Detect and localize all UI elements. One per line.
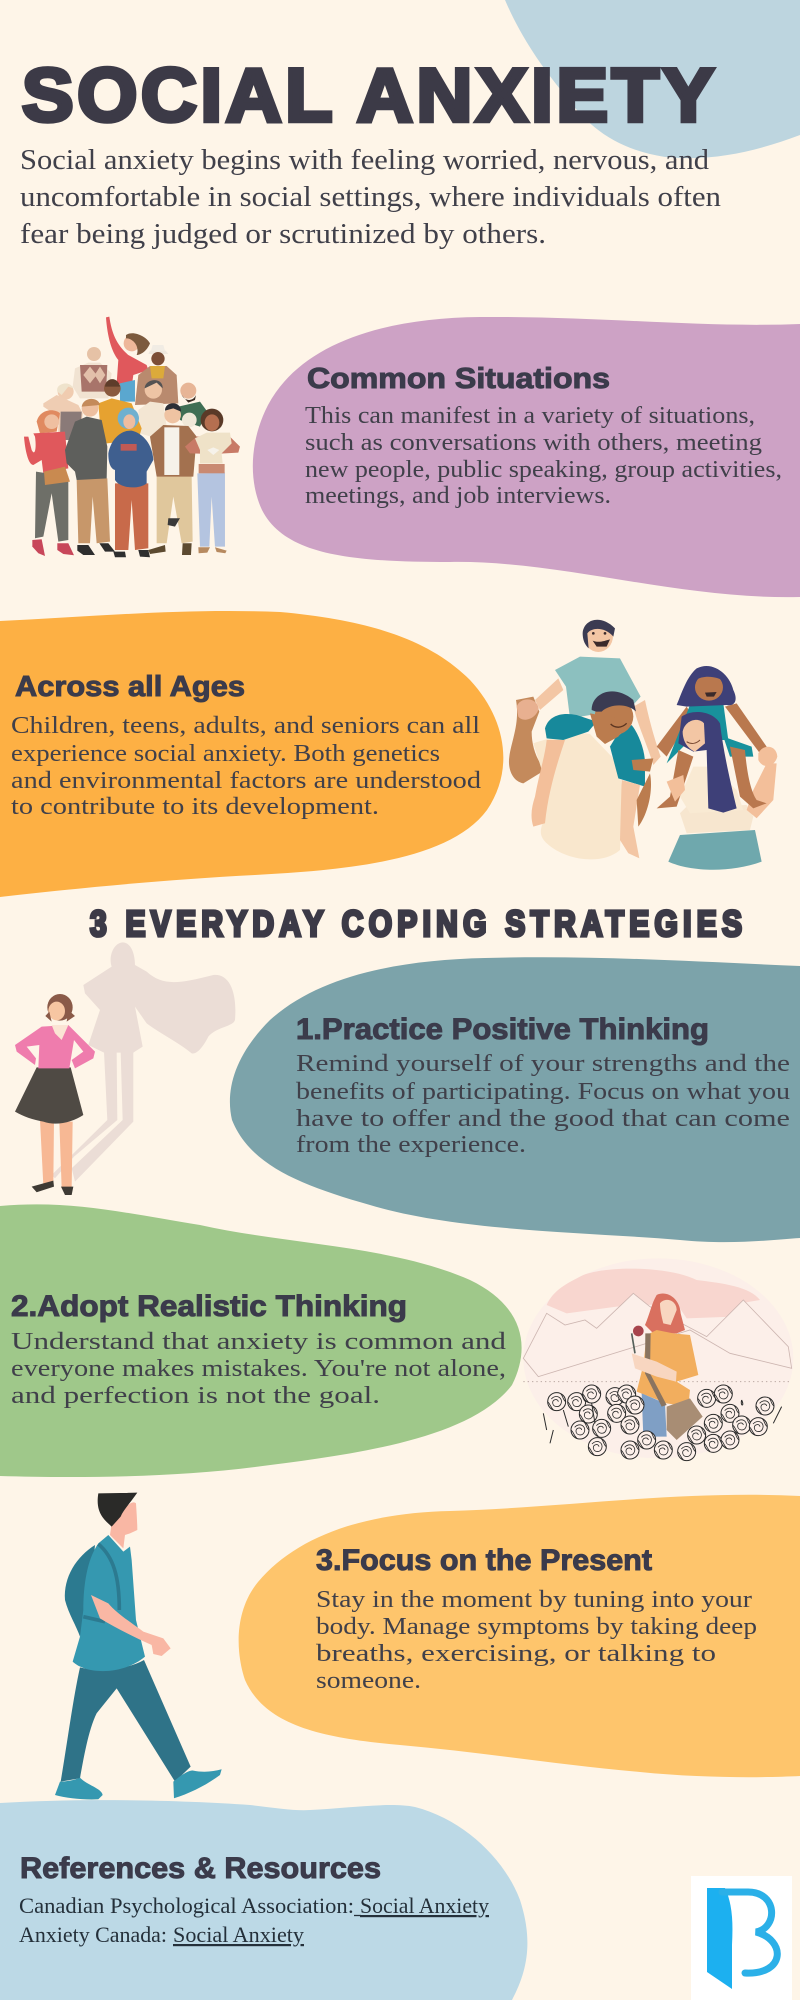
yellow blob (239, 1495, 800, 1777)
heading: coping strategies: 3 EVERYDAY COPING STRATEGIES (90, 904, 742, 945)
body: practice positive thinking: from the experience. (296, 1132, 526, 1158)
illustration: group of people (24, 317, 240, 557)
panel: strategy 1 (230, 957, 800, 1242)
illustration: man walking with backpack (55, 1493, 222, 1799)
body: common situations: meetings, and job interviews. (305, 483, 611, 509)
intro text (20, 144, 722, 250)
body: focus on the present: body. Manage symptoms by taking deep (316, 1614, 757, 1640)
body: common situations (305, 403, 782, 509)
decorative blob: top right (505, 0, 800, 158)
panel: strategy 2 (0, 1204, 522, 1477)
light blue blob (0, 1800, 527, 2000)
heading: practice positive thinking: 1.Practice Positive Thinking (296, 1013, 709, 1046)
body: across all ages (11, 713, 481, 820)
intro text: Social anxiety begins with feeling worried, nervous, and (20, 144, 710, 176)
body: across all ages: Children, teens, adults, and seniors can all (11, 713, 480, 739)
illustration: woman in flower field (523, 1258, 793, 1461)
body: adopt realistic thinking: everyone makes mistakes. You're not alone, (11, 1356, 506, 1382)
panel: strategy 3 (239, 1495, 800, 1777)
illustration: woman with superhero shadow (15, 942, 235, 1195)
reference line 1: Canadian Psychological Association: (19, 1893, 354, 1918)
body: adopt realistic thinking: and perfection is not the goal. (11, 1383, 380, 1409)
body: focus on the present: breaths, exercising, or talking to (316, 1641, 716, 1667)
reference line 2: Anxiety Canada: (19, 1922, 167, 1947)
orange blob (0, 611, 503, 897)
heading: adopt realistic thinking: 2.Adopt Realistic Thinking (11, 1290, 407, 1323)
body: common situations: such as conversations with others, meeting (305, 430, 762, 456)
body: adopt realistic thinking: Understand that anxiety is common and (11, 1329, 506, 1355)
reference line 1 (19, 1893, 489, 1918)
body: across all ages: experience social anxiety. Both genetics (11, 741, 440, 767)
purple blob (253, 317, 800, 597)
heading: focus on the present: 3.Focus on the Present (316, 1544, 652, 1577)
body: across all ages: and environmental factors are understood (11, 768, 481, 794)
reference line 2: Social Anxiety (173, 1922, 304, 1947)
reference line 2 (19, 1922, 304, 1947)
logo (691, 1876, 792, 2000)
reference line 1: Social Anxiety (360, 1893, 489, 1918)
body: practice positive thinking: benefits of participating. Focus on what you (296, 1079, 790, 1105)
title: SOCIAL ANXIETY (22, 54, 714, 138)
intro text: fear being judged or scrutinized by others. (20, 218, 546, 250)
intro text: uncomfortable in social settings, where individuals often (20, 181, 722, 213)
body: common situations: This can manifest in a variety of situations, (305, 403, 755, 429)
body: focus on the present (316, 1587, 757, 1694)
panel: common situations (253, 317, 800, 597)
illustration: family with kids on shoulders (509, 620, 777, 870)
body: focus on the present: someone. (316, 1668, 421, 1694)
body: focus on the present: Stay in the moment by tuning into your (316, 1587, 752, 1613)
body: practice positive thinking (296, 1051, 790, 1158)
heading: common situations: Common Situations (307, 363, 610, 395)
heading: across all ages: Across all Ages (15, 671, 245, 703)
teal blob (230, 957, 800, 1242)
body: adopt realistic thinking (11, 1329, 506, 1409)
panel: references and resources (0, 1800, 527, 2000)
panel: across all ages (0, 611, 503, 897)
body: across all ages: to contribute to its development. (11, 794, 379, 820)
heading: references and resources: References & Resources (20, 1852, 381, 1885)
body: practice positive thinking: Remind yourself of your strengths and the (296, 1051, 790, 1077)
body: common situations: new people, public speaking, group activities, (305, 457, 782, 483)
green blob (0, 1204, 522, 1477)
body: practice positive thinking: have to offer and the good that can come (296, 1106, 790, 1132)
